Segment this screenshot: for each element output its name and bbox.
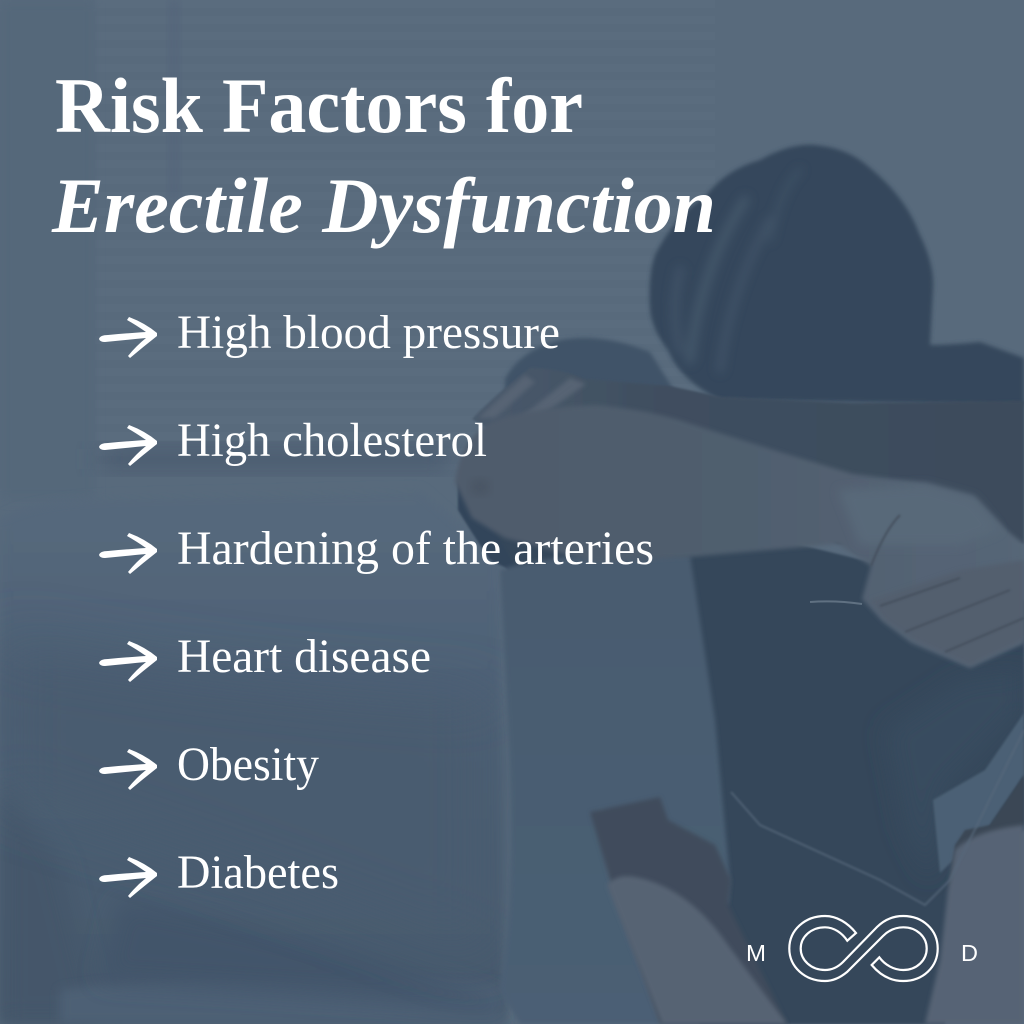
- risk factor list: [99, 306, 654, 899]
- list item: diabetes: Diabetes: [177, 846, 339, 899]
- title: Erectile Dysfunction: [51, 162, 716, 249]
- MD infinity logo: D: [961, 940, 978, 966]
- list item: high blood pressure: High blood pressure: [177, 306, 560, 359]
- list item: heart disease: Heart disease: [177, 630, 431, 683]
- list item: obesity: [99, 738, 319, 791]
- MD infinity logo: M: [746, 940, 766, 966]
- title: Risk Factors for: [55, 62, 583, 149]
- MD infinity logo: [746, 916, 978, 981]
- list item: diabetes: [99, 846, 339, 899]
- list item: high cholesterol: High cholesterol: [177, 414, 487, 467]
- list item: obesity: Obesity: [177, 738, 319, 791]
- list item: hardening of the arteries: Hardening of the arteries: [177, 522, 654, 575]
- title: [51, 62, 716, 249]
